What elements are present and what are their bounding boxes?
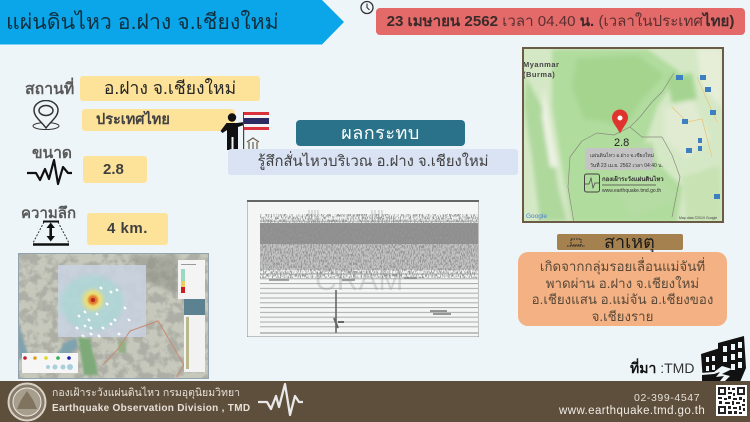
depth value	[87, 213, 168, 245]
date and time banner: 23 เมษายน 2562 เวลา 04.40 น. (เวลาในประเทศไทย)	[387, 13, 734, 30]
source label: ที่มา :TMD	[630, 360, 694, 376]
magnitude value	[83, 156, 147, 183]
location value: country: ประเทศไทย	[96, 112, 170, 128]
footer organisation name English: Earthquake Observation Division , TMD	[52, 403, 250, 414]
map: shake intensity	[18, 253, 209, 379]
impact description	[228, 149, 518, 175]
icon: seismic wave	[27, 158, 72, 186]
cause description: อ.เชียงแสน อ.แม่จัน อ.เชียงของ	[532, 292, 713, 307]
icon: depth	[32, 220, 70, 246]
icon: person with Thai flag	[220, 112, 269, 150]
cause description: เกิดจากกลุ่มรอยเลื่อนแม่จันที่	[540, 259, 705, 274]
map overlay caption	[584, 148, 664, 194]
icon: cause	[567, 238, 585, 246]
epicentre marker: 2.8	[614, 137, 629, 149]
watermark: CRAM	[315, 264, 403, 297]
footer website: www.earthquake.tmd.go.th	[559, 405, 705, 417]
seismogram	[247, 200, 479, 337]
map overlay caption: กองเฝ้าระวังแผ่นดินไหว	[602, 175, 664, 183]
map: Google map with epicentre	[522, 47, 724, 223]
map: Google map with epicentre: Map data ©2019 Google	[679, 216, 717, 220]
footer organisation name Thai: กองเฝ้าระวังแผ่นดินไหว กรมอุตุนิยมวิทยา	[52, 387, 240, 399]
footer phone: 02-399-4547	[634, 392, 700, 404]
cause description: จ.เชียงราย	[592, 309, 653, 324]
location value: district	[80, 76, 260, 101]
impact heading	[296, 120, 465, 146]
map: Google map with epicentre: (Burma)	[523, 70, 555, 79]
depth value: 4 km.	[107, 220, 148, 237]
header banner	[0, 0, 344, 44]
label: location: สถานที่	[25, 81, 74, 98]
location value: country	[82, 109, 235, 131]
cause description: พาดผ่าน อ.ฝาง จ.เชียงใหม่	[546, 276, 699, 291]
cause description	[518, 252, 727, 326]
icon: footer seismic wave	[258, 382, 303, 416]
epicentre marker	[612, 110, 629, 149]
label: depth: ความลึก	[21, 205, 76, 222]
label: magnitude: ขนาด	[32, 145, 72, 162]
icon: department seal	[8, 382, 46, 422]
map overlay caption: แผ่นดินไหว อ.ฝาง จ.เชียงใหม่	[590, 152, 654, 159]
map country label: Myanmar	[523, 60, 559, 69]
map overlay caption: วันที่ 23 เม.ย. 2562 เวลา 04:40 น.	[590, 162, 663, 169]
QR code	[716, 385, 747, 416]
location value: district: อ.ฝาง จ.เชียงใหม่	[104, 78, 236, 98]
date and time banner	[376, 8, 745, 35]
cause heading: สาเหตุ	[604, 232, 655, 252]
icon: location pin	[32, 100, 60, 130]
icon: clock	[360, 0, 374, 14]
magnitude value: 2.8	[103, 161, 124, 178]
cause heading	[557, 234, 683, 250]
title: แผ่นดินไหว อ.ฝาง จ.เชียงใหม่	[6, 10, 279, 34]
impact description: รู้สึกสั่นไหวบริเวณ อ.ฝาง จ.เชียงใหม่	[258, 154, 488, 170]
impact heading: ผลกระทบ	[341, 123, 420, 143]
map overlay caption: www.earthquake.tmd.go.th	[602, 188, 661, 194]
icon: collapsed building	[701, 336, 746, 381]
footer bar	[0, 381, 750, 422]
earthquake trace	[335, 290, 337, 333]
map: Google map with epicentre: Google	[526, 213, 547, 220]
